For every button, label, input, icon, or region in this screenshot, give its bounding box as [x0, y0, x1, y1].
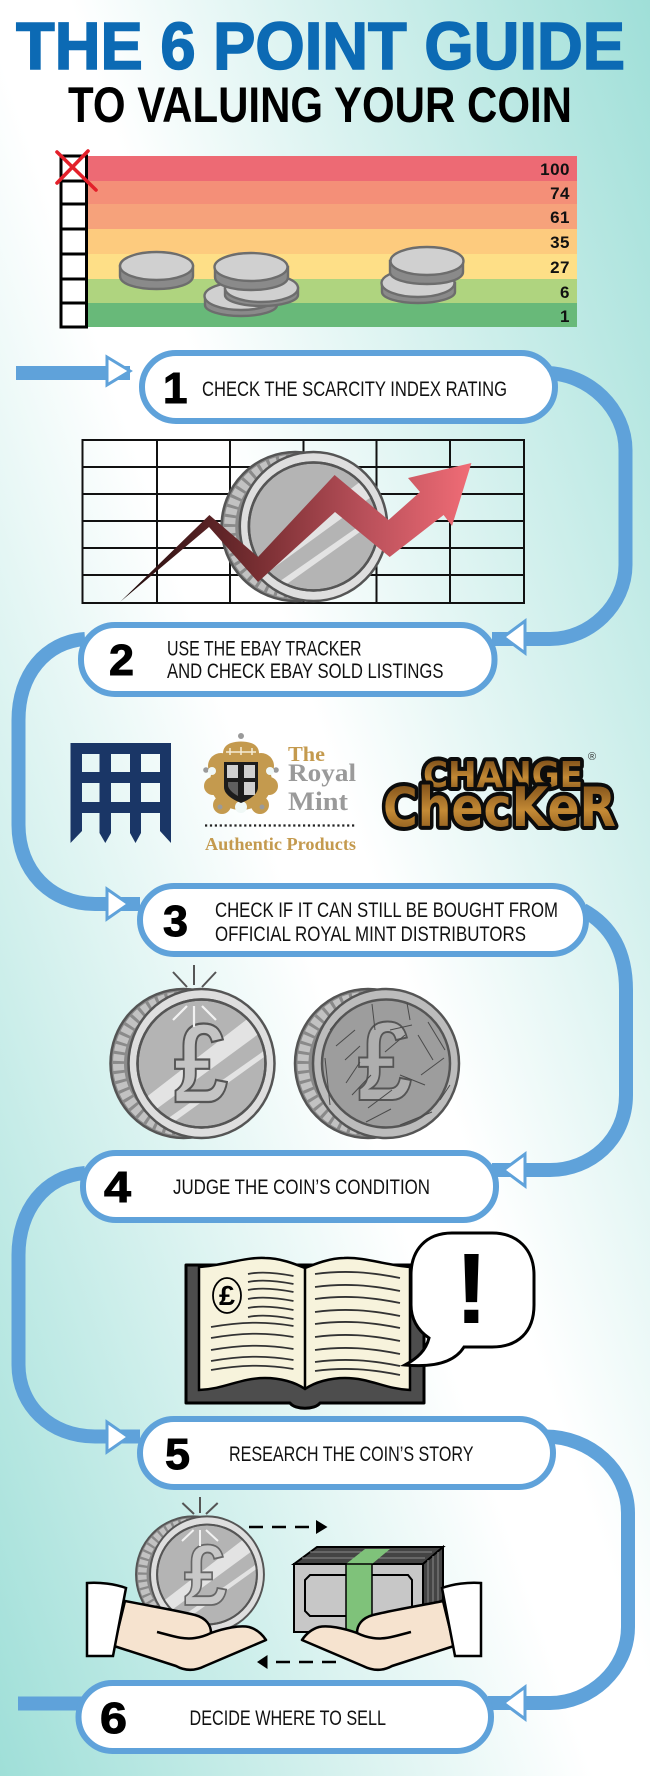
- pages: [199, 1258, 410, 1390]
- scarcity index chart: [57, 151, 577, 327]
- logo: Change Checker: CHANGE: [423, 755, 583, 796]
- rating numbers: [540, 160, 570, 326]
- arrow into step 1: [107, 357, 130, 385]
- logo: The Royal Mint: The: [288, 742, 325, 766]
- arrow into step 5: [107, 1422, 128, 1452]
- title: [16, 9, 625, 133]
- speech bubble: !: [455, 1233, 488, 1345]
- step 3 pill: [140, 886, 586, 954]
- rating numbers: 6: [560, 283, 570, 302]
- zigzag arrow: [120, 463, 471, 602]
- new shiny pound coin: £: [174, 1001, 228, 1126]
- held coin: £: [184, 1528, 227, 1624]
- logo: The Royal Mint: Mint: [288, 787, 348, 816]
- step 4 pill: JUDGE THE COIN’S CONDITION: [173, 1176, 430, 1199]
- arrow: coin to cash: [249, 1520, 328, 1534]
- step 1 pill: [142, 353, 555, 421]
- arrow into step 6: [504, 1687, 525, 1719]
- chart: coin with rising arrow: [82, 440, 524, 603]
- arrow into step 4: [504, 1154, 525, 1186]
- open book with speech bubble: [186, 1233, 534, 1408]
- logo: Change Checker: [383, 751, 616, 839]
- logo: portcullis: [70, 743, 171, 843]
- grid: [82, 440, 524, 603]
- logo: Change Checker: ChecKeR: [383, 776, 616, 839]
- right page text lines: [315, 1272, 400, 1375]
- exchange: coin, hands, cash: [87, 1497, 481, 1670]
- worn pound coin: [295, 989, 459, 1138]
- step 5 pill: 5: [165, 1430, 190, 1479]
- step 2 pill: USE THE EBAY TRACKER: [167, 638, 362, 660]
- rating tick boxes: [61, 156, 86, 327]
- right hand: [302, 1583, 481, 1670]
- step 6 pill: DECIDE WHERE TO SELL: [190, 1707, 386, 1730]
- step 6 pill: 6: [100, 1694, 127, 1743]
- cover: [186, 1265, 424, 1408]
- dotted rule: [205, 824, 356, 827]
- red cross: [57, 151, 96, 190]
- step 6 pill: [78, 1683, 491, 1751]
- held coin: [136, 1497, 265, 1633]
- speech bubble: [405, 1233, 534, 1366]
- rating numbers: 61: [550, 208, 570, 227]
- title: THE 6 POINT GUIDE: [16, 9, 625, 84]
- step 5 pill: RESEARCH THE COIN’S STORY: [229, 1443, 474, 1466]
- pound medallion: [213, 1278, 241, 1313]
- left page text lines: [211, 1273, 294, 1370]
- step 3 pill: 3: [163, 897, 188, 946]
- arrow into step 2: [504, 621, 525, 653]
- step 2 pill: 2: [109, 636, 134, 685]
- new shiny pound coin: [110, 965, 276, 1138]
- logo: The Royal Mint: [203, 733, 356, 854]
- step 4 pill: [83, 1153, 496, 1220]
- step 3 pill: CHECK IF IT CAN STILL BE BOUGHT FROM: [215, 899, 558, 922]
- pound medallion: £: [219, 1280, 235, 1311]
- worn pound coin: £: [358, 999, 412, 1124]
- step 1 pill: CHECK THE SCARCITY INDEX RATING: [202, 378, 507, 401]
- step 1 pill: 1: [163, 364, 187, 413]
- step 5 pill: [140, 1419, 553, 1487]
- logo: The Royal Mint: Authentic Products: [205, 834, 356, 854]
- rating numbers: 27: [550, 258, 570, 277]
- scratches: [325, 1003, 450, 1125]
- flow connector lines: [16, 373, 628, 1704]
- rating numbers: 74: [550, 184, 570, 203]
- rating numbers: 1: [560, 307, 570, 326]
- logo: The Royal Mint: Royal: [288, 760, 356, 787]
- step 4 pill: 4: [104, 1163, 132, 1212]
- coin: [222, 452, 388, 601]
- left hand: [87, 1583, 266, 1670]
- step 2 pill: [81, 625, 494, 694]
- rating numbers: 35: [550, 233, 570, 252]
- cash bundle: [294, 1547, 443, 1632]
- step 2 pill: AND CHECK EBAY SOLD LISTINGS: [167, 660, 444, 683]
- arrow: cash to coin: [257, 1655, 336, 1669]
- arrow into step 3: [107, 889, 128, 919]
- rating numbers: 100: [540, 160, 570, 179]
- step 3 pill: OFFICIAL ROYAL MINT DISTRIBUTORS: [215, 923, 526, 946]
- crest: [203, 733, 279, 814]
- logo: Change Checker: ®: [588, 751, 596, 763]
- sparkle: [173, 965, 216, 987]
- coin stacks: [120, 247, 464, 316]
